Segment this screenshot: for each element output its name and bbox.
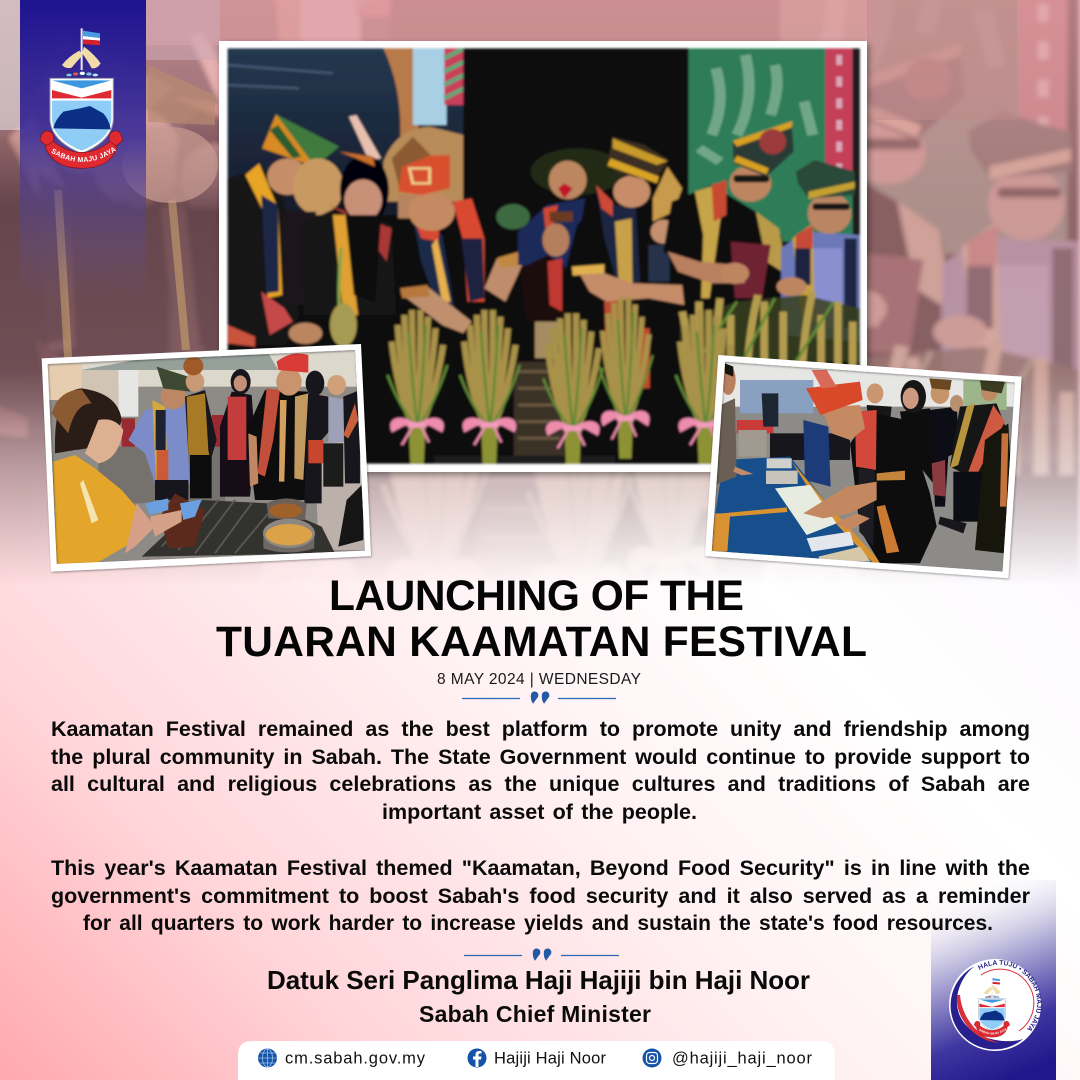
body paragraph 2: for all quarters to work harder to increase yields and sustain the state's food resources. <box>83 912 993 935</box>
speaker role: Sabah Chief Minister <box>419 1001 651 1027</box>
man behind <box>185 390 217 457</box>
background photo <box>0 0 1080 574</box>
body paragraph 1: Kaamatan Festival remained as the best platform to promote unity and friendship among <box>51 717 1030 741</box>
photo: dignitaries cutting rice stalks <box>228 48 860 467</box>
body paragraph 1 <box>51 717 1030 824</box>
title <box>216 573 867 666</box>
pots <box>267 498 307 520</box>
mini crest <box>974 977 1010 1037</box>
bottom quote divider <box>464 948 619 961</box>
table <box>710 457 880 563</box>
circular Hala Tuju logo <box>949 959 1042 1051</box>
top-left blue banner <box>20 0 146 300</box>
woman <box>220 392 255 497</box>
date: 8 MAY 2024 | WEDNESDAY <box>437 671 641 688</box>
body paragraph 2: government's commitment to boost Sabah's food security and it also served as a reminder <box>51 884 1030 908</box>
left side figures <box>0 127 219 440</box>
bottom-right blue banner <box>931 880 1056 1080</box>
right upper wall tint <box>867 0 1017 120</box>
photo frame <box>219 41 867 472</box>
man blue shirt <box>128 403 190 483</box>
chief minister <box>247 390 312 500</box>
body paragraph 1: the plural community in Sabah. The State Government would continue to provide support to <box>51 745 1030 769</box>
body paragraph 2: This year's Kaamatan Festival themed "Kaamatan, Beyond Food Security" is in line with the <box>51 856 1030 880</box>
website: cm.sabah.gov.my <box>285 1050 426 1068</box>
main photo <box>219 41 867 472</box>
white photo frame <box>42 344 371 572</box>
woman in yellow <box>53 455 136 564</box>
people right <box>866 405 892 417</box>
instagram handle: @hajiji_haji_noor <box>672 1050 812 1068</box>
facebook name: Hajiji Haji Noor <box>494 1050 606 1068</box>
woman right <box>304 393 328 504</box>
woman left <box>715 398 737 485</box>
left small photo: food grilling stall <box>42 344 371 572</box>
body paragraph 1: all cultural and religious celebrations as the unique cultures and traditions of Sabah are <box>51 772 1030 796</box>
top quote divider <box>462 691 616 704</box>
title: LAUNCHING OF THE <box>329 573 744 620</box>
white photo frame <box>705 355 1022 578</box>
icon: instagram <box>642 1048 662 1068</box>
right small photo: signing at the table <box>705 355 1022 578</box>
grill <box>142 500 335 557</box>
Sabah coat of arms logo <box>40 28 123 168</box>
body paragraph 2 <box>51 856 1030 935</box>
circular Hala Tuju logo: HALA TUJU • SABAH MAJU JAYA <box>978 960 1042 1031</box>
title: TUARAN KAAMATAN FESTIVAL <box>216 619 867 666</box>
main man signing <box>850 413 937 563</box>
contact bar <box>238 1041 835 1080</box>
icon: globe <box>258 1048 277 1068</box>
body paragraph 1: important asset of the people. <box>382 800 697 824</box>
speaker name: Datuk Seri Panglima Haji Hajiji bin Haji Noor <box>267 965 810 995</box>
icon: facebook <box>468 1048 486 1068</box>
top strip above the main photo <box>146 0 876 45</box>
